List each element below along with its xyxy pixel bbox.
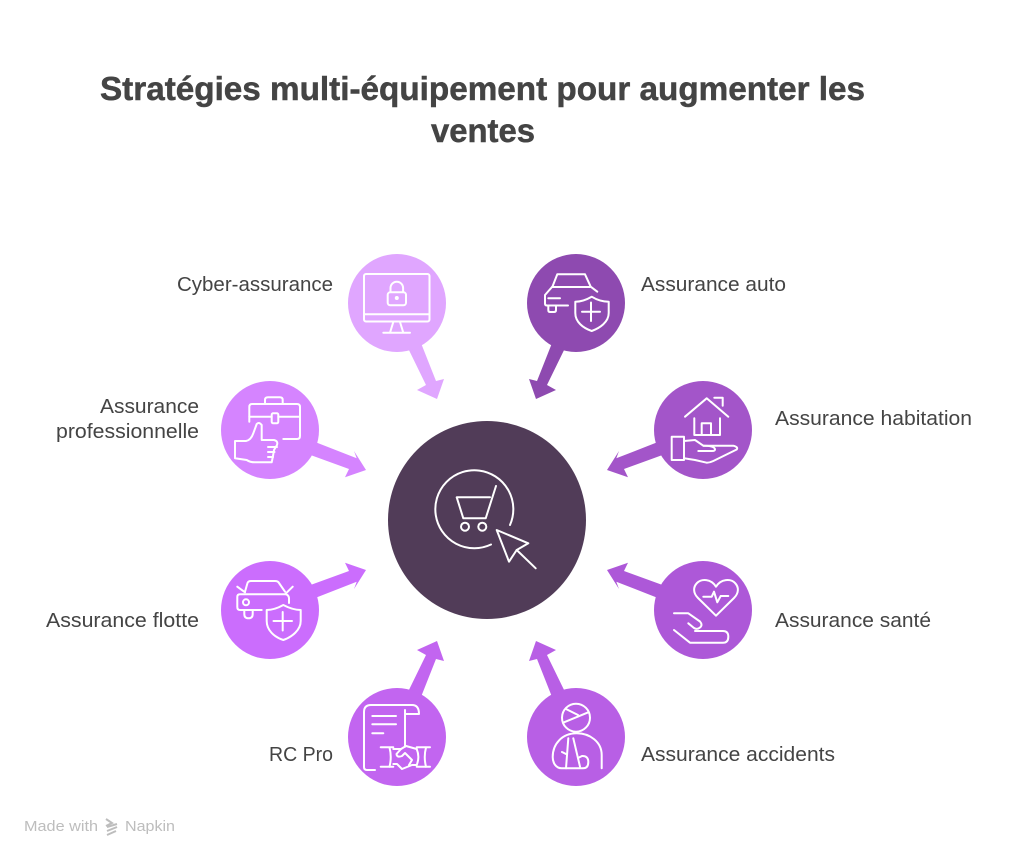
- icon: fleet car and shield: [237, 581, 301, 640]
- label: RC Pro: RC Pro: [269, 744, 333, 766]
- node: Assurance accidents: [527, 641, 625, 786]
- icon: contract and handshake: [364, 705, 430, 770]
- watermark: Made with Napkin: Napkin: [125, 818, 175, 835]
- label: Assurance flotte: Assurance flotte: [46, 610, 199, 632]
- icon: heart on hand: [674, 580, 738, 643]
- icon: injured person with sling: [553, 704, 602, 768]
- icon: house on hand: [672, 398, 737, 463]
- watermark: Made with Napkin: [24, 818, 175, 835]
- label: Assurance habitation: Assurance habitation: [775, 408, 972, 430]
- title: Stratégies multi-équipement pour augmenter les: [100, 70, 865, 107]
- central circle: shopping cart: [388, 421, 586, 619]
- node: Assurance auto: [527, 254, 625, 399]
- label: Assurance professionnelle: Assurance: [100, 396, 199, 418]
- icon: briefcase and thumb up: [235, 397, 300, 462]
- icon: Napkin logo: [106, 819, 117, 835]
- node: Assurance flotte: [221, 561, 366, 659]
- watermark: Made with Napkin: Made with: [24, 818, 98, 835]
- icon: locked monitor: [364, 274, 430, 333]
- node: Assurance santé: [607, 561, 752, 659]
- label: Assurance accidents: Assurance accidents: [641, 744, 835, 766]
- icon: car and shield: [545, 274, 609, 331]
- label: Assurance auto: Assurance auto: [641, 274, 786, 296]
- icon: cart and cursor: [435, 470, 536, 568]
- node: Assurance habitation: [607, 381, 752, 479]
- label: Cyber-assurance: Cyber-assurance: [177, 274, 333, 296]
- node: Cyber-assurance: [348, 254, 446, 399]
- label: Assurance professionnelle: professionnelle: [56, 421, 199, 443]
- node: RC Pro: [348, 641, 446, 786]
- title: [100, 70, 865, 149]
- title: ventes: [431, 112, 535, 149]
- label: Assurance santé: Assurance santé: [775, 610, 931, 632]
- label: Assurance professionnelle: [56, 396, 199, 443]
- node: Assurance professionnelle: [221, 381, 366, 479]
